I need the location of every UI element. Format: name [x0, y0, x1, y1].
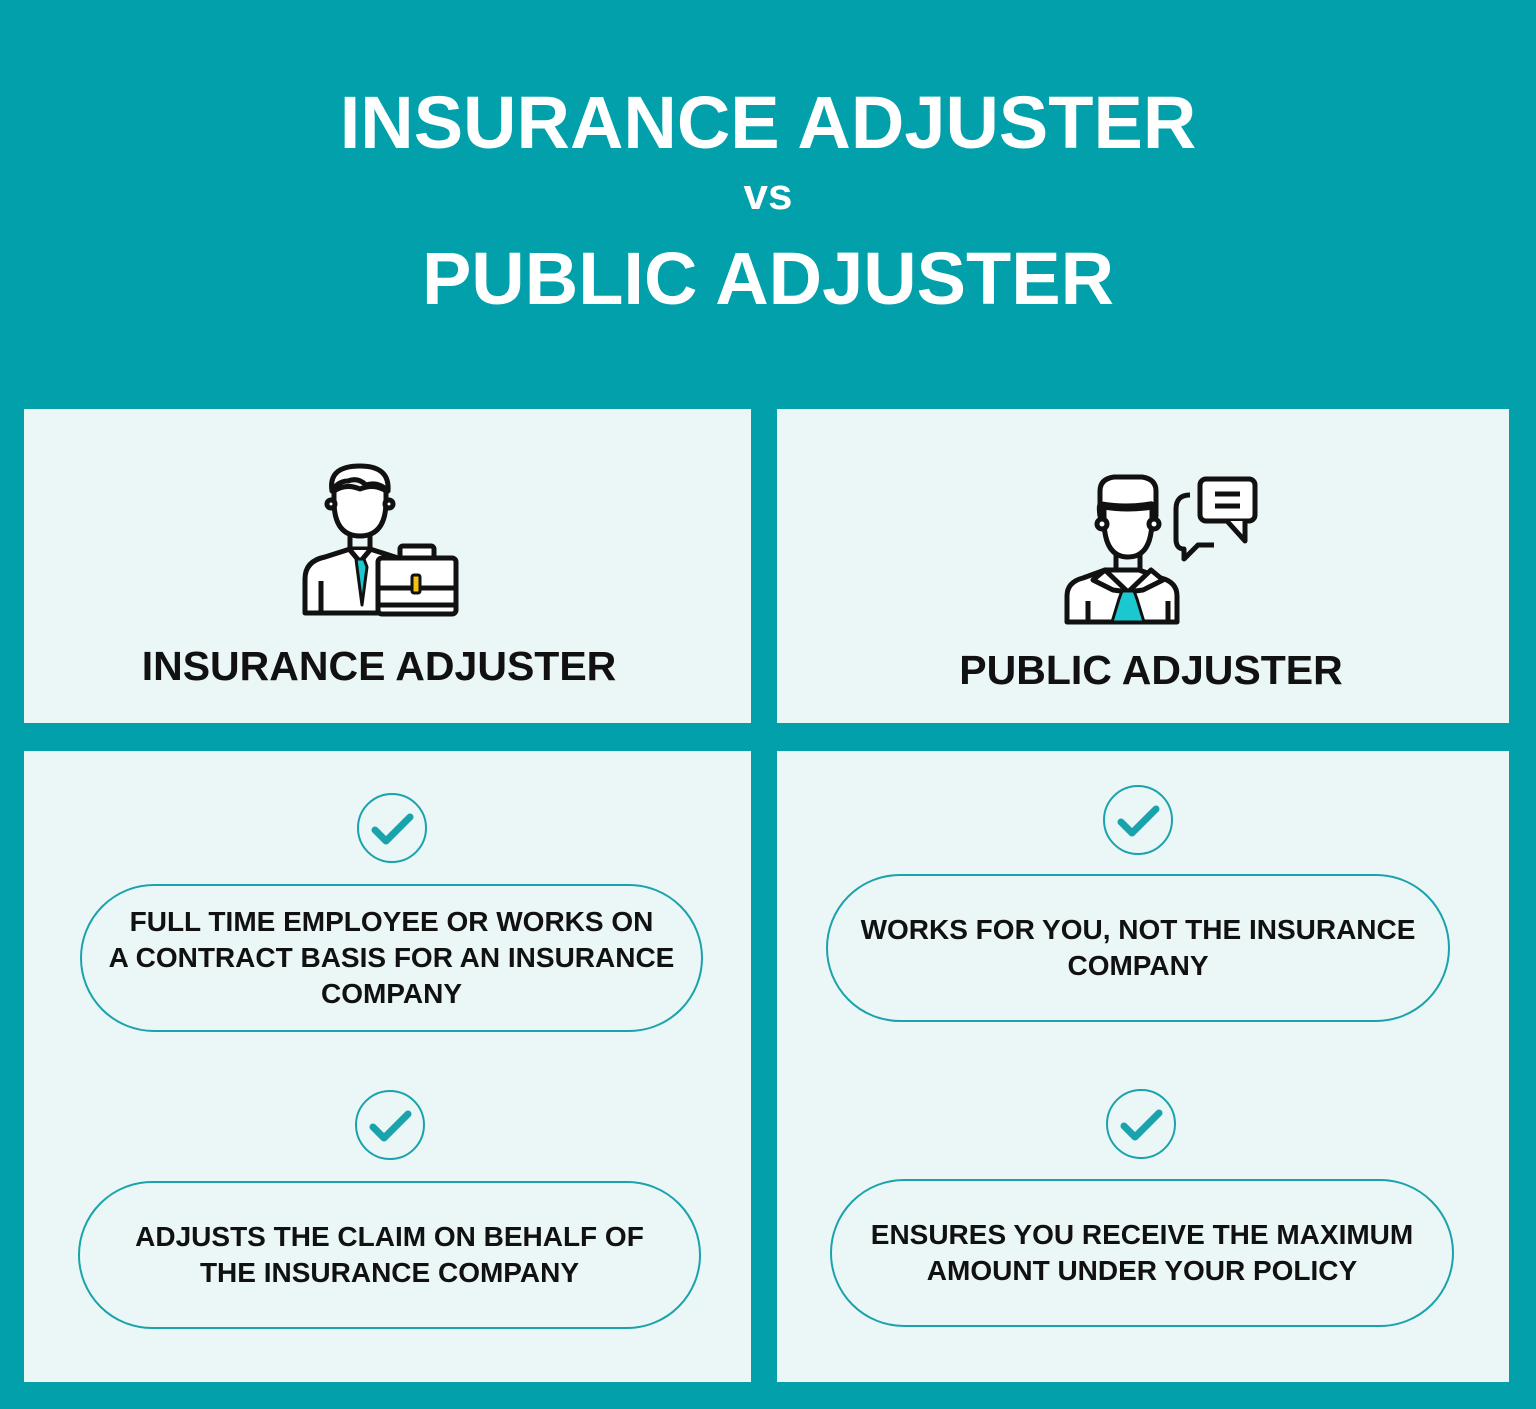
icon: check 4 — [1106, 1089, 1176, 1159]
pill: full time employee: A CONTRACT BASIS FOR AN INSURANCE — [109, 942, 674, 973]
pill: full time employee: COMPANY — [321, 978, 462, 1009]
panel: insurance adjuster header — [24, 409, 751, 723]
pill: ensures maximum — [830, 1179, 1454, 1327]
pill: full time employee: FULL TIME EMPLOYEE OR WORKS ON — [130, 906, 653, 937]
pill: works for you: COMPANY — [1067, 950, 1209, 981]
title: INSURANCE ADJUSTER — [340, 81, 1196, 164]
pill: adjusts the claim: ADJUSTS THE CLAIM ON BEHALF OF — [135, 1221, 644, 1252]
title: vs — [744, 170, 792, 219]
pill: works for you — [826, 874, 1450, 1022]
icon: check 2 — [355, 1090, 425, 1160]
panel: public adjuster points — [777, 751, 1509, 1382]
pill: adjusts the claim — [78, 1181, 701, 1329]
icon: man with speech bubble — [1064, 474, 1258, 624]
pill: adjusts the claim: THE INSURANCE COMPANY — [200, 1257, 579, 1288]
panel: public adjuster header — [777, 409, 1509, 723]
pill: ensures maximum: AMOUNT UNDER YOUR POLICY — [927, 1255, 1357, 1286]
title — [340, 81, 1196, 320]
pill: full time employee — [80, 884, 703, 1032]
icon: check 1 — [357, 793, 427, 863]
icon: man with briefcase — [302, 464, 458, 616]
pill: ensures maximum: ENSURES YOU RECEIVE THE MAXIMUM — [871, 1219, 1413, 1250]
label: public adjuster: PUBLIC ADJUSTER — [959, 647, 1343, 693]
title: PUBLIC ADJUSTER — [422, 237, 1114, 320]
pill: works for you: WORKS FOR YOU, NOT THE INSURANCE — [861, 914, 1415, 945]
label: insurance adjuster: INSURANCE ADJUSTER — [142, 643, 616, 689]
icon: check 3 — [1103, 785, 1173, 855]
panel: insurance adjuster points — [24, 751, 751, 1382]
